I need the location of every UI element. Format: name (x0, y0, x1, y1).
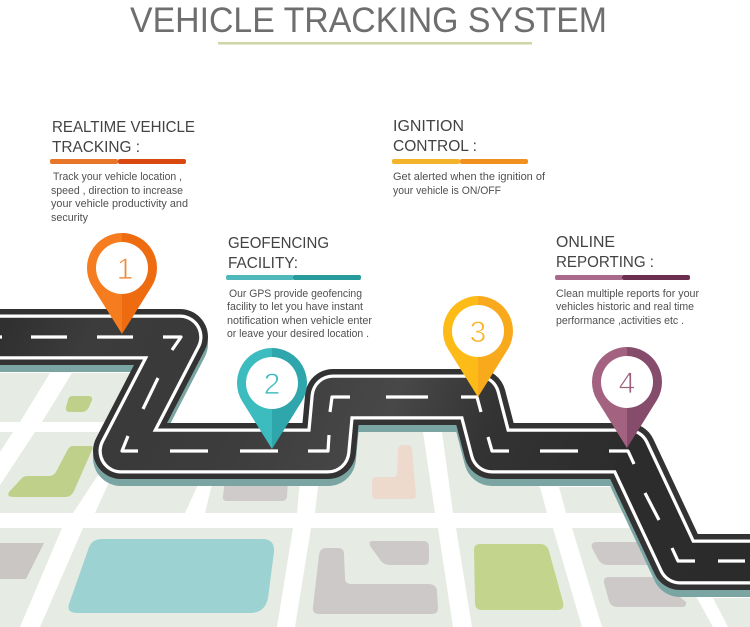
map: green park L (8, 446, 93, 497)
panel: geofencing facility: notification when vehicle enter (227, 315, 372, 327)
pin 2: 2 (264, 368, 280, 401)
panel: geofencing facility (226, 235, 372, 340)
pin 1 (87, 233, 157, 334)
panel: ignition control: CONTROL : (393, 138, 477, 155)
panel: geofencing facility: FACILITY: (228, 255, 298, 272)
panel: online reporting: REPORTING : (556, 254, 654, 271)
pin 4: 4 (619, 367, 635, 400)
panel: geofencing facility: or leave your desired location . (227, 328, 369, 340)
pin 2 (237, 348, 307, 449)
panel: realtime vehicle tracking: Track your vehicle location , (53, 171, 182, 183)
panel: realtime vehicle tracking: REALTIME VEHICLE (52, 119, 195, 136)
panel: ignition control (392, 118, 546, 197)
panel: online reporting: Clean multiple reports for your (556, 288, 699, 300)
panel: ignition control: your vehicle is ON/OFF (393, 185, 501, 197)
road centre dashes (0, 337, 745, 561)
panel: online reporting: performance ,activities etc . (556, 315, 684, 327)
panel: geofencing facility: facility to let you have instant (227, 301, 363, 313)
panel: online reporting: vehicles historic and real time (556, 301, 694, 313)
pin 4 (592, 347, 662, 448)
panel: ignition control: IGNITION (393, 118, 464, 135)
map: gray block near road (223, 480, 288, 501)
panel: realtime vehicle tracking (50, 119, 195, 224)
map: gray block right bottom (604, 577, 686, 607)
title underline (218, 42, 532, 44)
panel: geofencing facility: GEOFENCING (228, 235, 329, 252)
panel: ignition control: Get alerted when the ignition of (393, 171, 546, 183)
road (0, 337, 750, 569)
panel: realtime vehicle tracking: speed , direction to increase (51, 185, 183, 197)
panel: realtime vehicle tracking: security (51, 212, 88, 224)
map: gray block left (0, 543, 44, 579)
panel: realtime vehicle tracking: your vehicle productivity and (51, 198, 188, 210)
pin 3 (443, 296, 513, 397)
map: salmon block (372, 445, 416, 499)
map background (0, 373, 750, 627)
pin 3: 3 (470, 316, 486, 349)
map: gray small block (369, 541, 429, 565)
title: VEHICLE TRACKING SYSTEM (130, 1, 607, 40)
map: green park small (66, 396, 92, 412)
panel: online reporting (555, 234, 699, 327)
panel: online reporting: ONLINE (556, 234, 615, 251)
map: green block (474, 544, 563, 610)
map: gray L block (313, 548, 438, 614)
pin 1: 1 (117, 253, 133, 286)
panel: realtime vehicle tracking: TRACKING : (52, 139, 140, 156)
map: gray block right top (592, 542, 650, 565)
map: teal lake (68, 539, 274, 613)
panel: geofencing facility: Our GPS provide geofencing (229, 288, 362, 300)
